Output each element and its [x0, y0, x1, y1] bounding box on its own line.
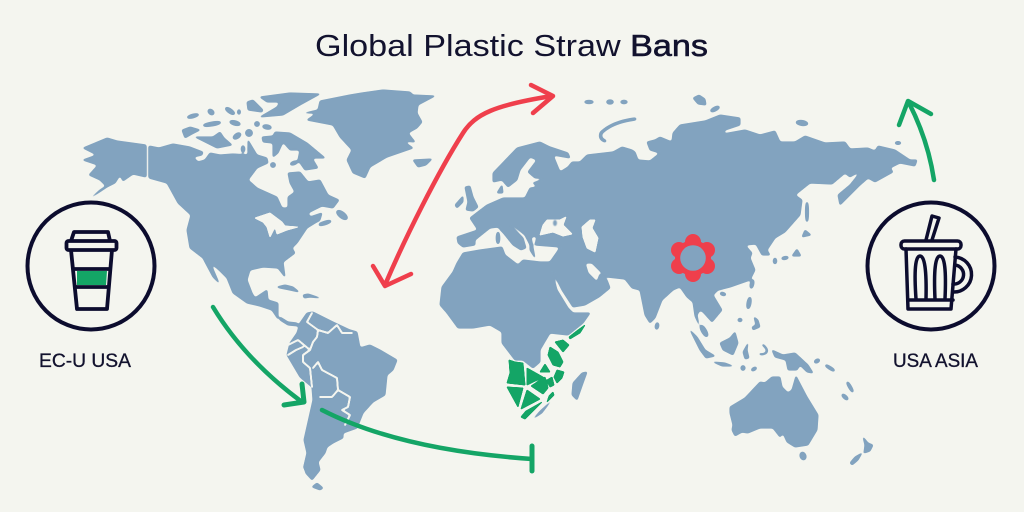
- green arrow to north-east: [899, 101, 934, 180]
- Black Sea: [540, 217, 572, 236]
- Newfoundland and Nova Scotia: [318, 209, 349, 227]
- world map: [83, 90, 917, 490]
- red flower marker over China: [671, 234, 715, 282]
- Crimea: [553, 220, 557, 226]
- Southern Africa sliver: [533, 400, 552, 419]
- New Guinea: [772, 350, 813, 373]
- Japan and Sakhalin: [773, 202, 811, 264]
- red double-headed arrow: [373, 85, 553, 286]
- Caribbean islands: [277, 285, 320, 298]
- New Zealand: [850, 437, 873, 465]
- Tasmania: [799, 451, 807, 461]
- Madagascar: [572, 372, 587, 400]
- green line ending in a bar: [322, 410, 532, 471]
- Tierra del Fuego: [312, 483, 323, 490]
- South American borders: [288, 313, 352, 475]
- Great Lakes: [255, 213, 298, 237]
- Arctic Russian islands: [584, 95, 901, 144]
- inland seas and lakes: [255, 213, 598, 252]
- highlighted green East and Southern Africa regions: [507, 325, 585, 419]
- European islands: [455, 185, 503, 244]
- Canada, USA, Mexico and Central America: [149, 140, 339, 319]
- South America: [287, 312, 397, 480]
- Australia: [730, 376, 818, 447]
- Africa: [440, 247, 590, 368]
- Arctic islands: [182, 93, 325, 170]
- Alaska: [83, 138, 146, 197]
- Caspian Sea: [582, 220, 598, 252]
- icon: cup with straw and handle in circle: [868, 202, 994, 330]
- icon: takeaway coffee cup in circle: [28, 202, 154, 330]
- label: USA ASIA: USA ASIA: [893, 351, 978, 372]
- Central America isthmus: [280, 317, 299, 326]
- green arrow into South America: [213, 307, 304, 405]
- Eurasia: [457, 115, 917, 325]
- Pacific islands: [814, 358, 854, 401]
- Greenland: [305, 90, 435, 178]
- title: Global Plastic Straw Bans: [315, 28, 708, 63]
- Iceland: [413, 159, 432, 167]
- label: EC-U USA: EC-U USA: [39, 351, 131, 372]
- Southeast Asia islands: [655, 279, 767, 372]
- landmasses: [83, 90, 917, 490]
